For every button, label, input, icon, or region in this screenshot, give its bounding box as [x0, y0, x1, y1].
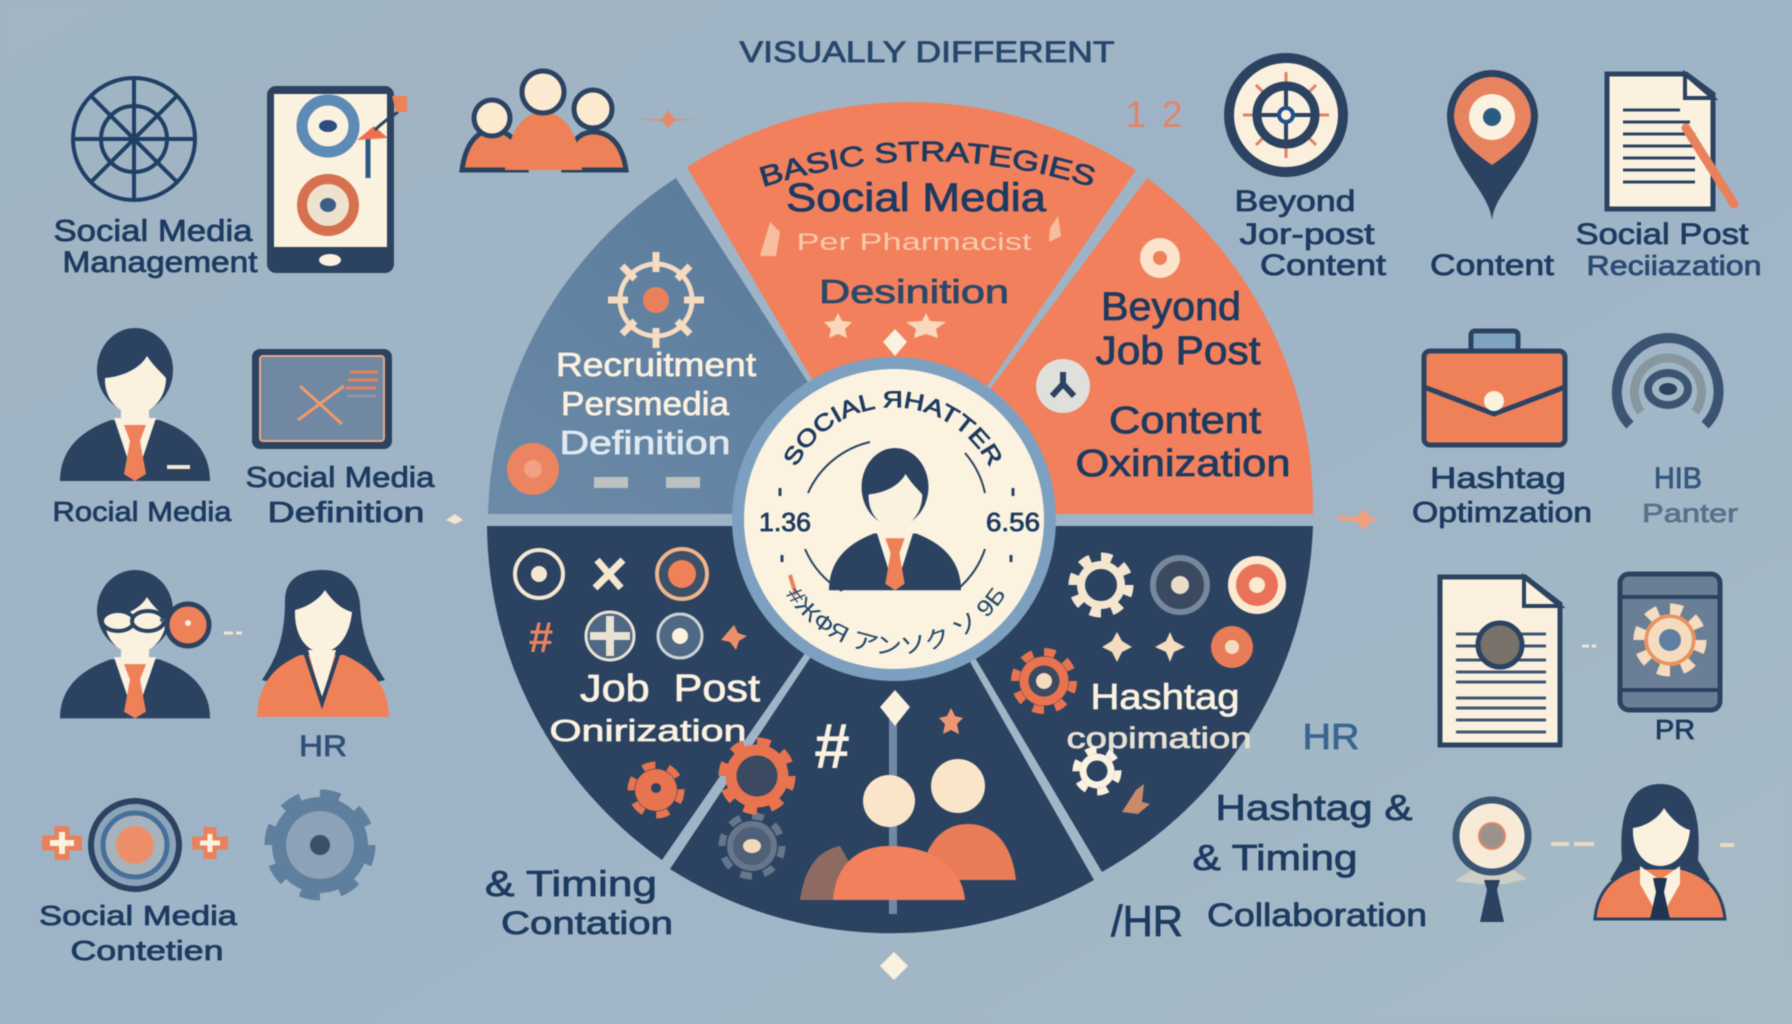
label: rocial media: Rocial Media	[52, 496, 232, 527]
outer label: HR collaboration	[1111, 897, 1427, 946]
icon: man with glasses	[60, 570, 242, 718]
panel: central wheel	[486, 102, 1314, 934]
outer label: hashtag and timing: Hashtag &	[1216, 787, 1412, 828]
wedge: basic strategies: Per Pharmacist	[796, 229, 1032, 256]
label: beyond job post content: Jor-post	[1240, 218, 1375, 251]
icon: dashes	[1551, 844, 1734, 845]
wedge: recruitment definition: Persmedia	[561, 385, 730, 422]
diamond markers	[446, 509, 1379, 980]
label: HIB panter: HIB	[1654, 462, 1702, 495]
wedge: job post optimization	[487, 526, 893, 860]
icon: web wheel	[73, 78, 195, 200]
wedge: beyond job post content: Oxinization	[1076, 443, 1290, 485]
label: social media contetien	[39, 900, 238, 966]
icon: gear	[272, 797, 368, 893]
label: HR: HR	[299, 730, 347, 763]
outer label: hashtag and timing: & Timing	[1192, 837, 1358, 878]
icon: woman	[257, 570, 389, 717]
wedge: job post optimization: Onirization	[550, 713, 746, 748]
outer label: timing contation	[485, 863, 673, 941]
wedge: team collaboration	[670, 530, 1094, 933]
label: HIB panter: Panter	[1642, 498, 1738, 528]
wedge: hashtag optimization: Hashtag	[1090, 676, 1240, 717]
label: content: Content	[1430, 249, 1555, 282]
title: VISUALLY DIFFERENT	[740, 36, 1114, 69]
label: beyond job post content: Content	[1260, 249, 1387, 282]
wedge: recruitment definition	[488, 178, 893, 514]
icon: target wheel	[1229, 58, 1343, 172]
outer label: HR: HR	[1302, 716, 1360, 757]
icon: orange gear	[723, 742, 791, 810]
icon: dots	[1582, 644, 1596, 648]
center badge: 1.36	[759, 507, 811, 537]
center badge: 6.56	[986, 507, 1040, 537]
icon: document with seal	[1440, 577, 1560, 745]
icon: man in suit	[60, 328, 210, 481]
wedge: basic strategies: Desinition	[819, 273, 1009, 310]
wedge: job post optimization: #	[529, 613, 553, 662]
wedge: recruitment definition: Recruitment	[556, 346, 756, 383]
label: social post reciiazation	[1576, 218, 1762, 281]
label: social media management: Management	[62, 246, 258, 279]
label: HIB panter	[1642, 462, 1738, 528]
icon: target with plus signs	[42, 801, 228, 889]
number marker: 1 2	[1126, 94, 1182, 135]
label: social media contetien: Contetien	[70, 935, 224, 966]
label: PR: PR	[1655, 714, 1695, 745]
icon: center person	[829, 448, 961, 590]
label: social media contetien: Social Media	[39, 900, 238, 931]
icon: screen with cross	[252, 349, 392, 449]
center badge: SOCIAL ЯHATTER	[784, 390, 1002, 468]
wedge: beyond job post content: Beyond	[1101, 285, 1241, 329]
label: social media definition	[246, 462, 435, 529]
center badge: #ЖФЯ アンソク ソ 9Б	[786, 586, 1005, 654]
icon: map pin	[1447, 70, 1538, 220]
wedge: job post optimization: Job Post	[580, 668, 761, 710]
icon: people group	[462, 71, 626, 170]
wedge: team collaboration: #	[814, 710, 850, 782]
icon: briefcase	[1424, 331, 1565, 445]
wedge: recruitment definition: Definition	[560, 424, 730, 461]
wedge: hashtag optimization	[897, 526, 1313, 872]
icon: phone	[267, 86, 407, 273]
label: social media management: Social Media	[54, 213, 253, 248]
icon: signal rings	[1617, 338, 1719, 425]
outer label: hashtag and timing	[1192, 787, 1412, 878]
label: beyond job post content	[1234, 185, 1387, 282]
label: hashtag optimization	[1412, 462, 1592, 529]
outer label: timing contation: & Timing	[485, 863, 657, 904]
icon: person badge	[1455, 800, 1528, 922]
icon: woman with tie	[1595, 784, 1725, 919]
label: beyond job post content: Beyond	[1234, 185, 1356, 218]
wedge: beyond job post content	[897, 178, 1313, 514]
wedge: beyond job post content: Content	[1109, 400, 1262, 442]
label: social post reciiazation: Reciiazation	[1586, 250, 1762, 281]
center badge	[732, 356, 1056, 682]
label: social media definition: Definition	[268, 497, 424, 529]
wedge: beyond job post content: Job Post	[1096, 329, 1260, 373]
icon: document with pencil	[1607, 74, 1734, 209]
wedge: basic strategies: BASIC STRATEGIES	[758, 140, 1096, 188]
outer label: HR collaboration: Collaboration	[1207, 897, 1427, 933]
wedge: basic strategies	[686, 102, 1136, 387]
label: social media definition: Social Media	[246, 462, 435, 494]
wedge: hashtag optimization: copimation	[1066, 722, 1252, 755]
outer label: timing contation: Contation	[501, 905, 673, 941]
label: hashtag optimization: Hashtag	[1430, 462, 1566, 495]
icon: tablet with gear	[1620, 574, 1720, 710]
label: hashtag optimization: Optimzation	[1412, 497, 1592, 529]
label: social media management	[54, 213, 258, 279]
icon: connector	[636, 110, 695, 128]
outer label: HR collaboration: /HR	[1111, 897, 1183, 946]
label: social post reciiazation: Social Post	[1576, 218, 1749, 251]
wedge: basic strategies: Social Media	[786, 176, 1047, 220]
